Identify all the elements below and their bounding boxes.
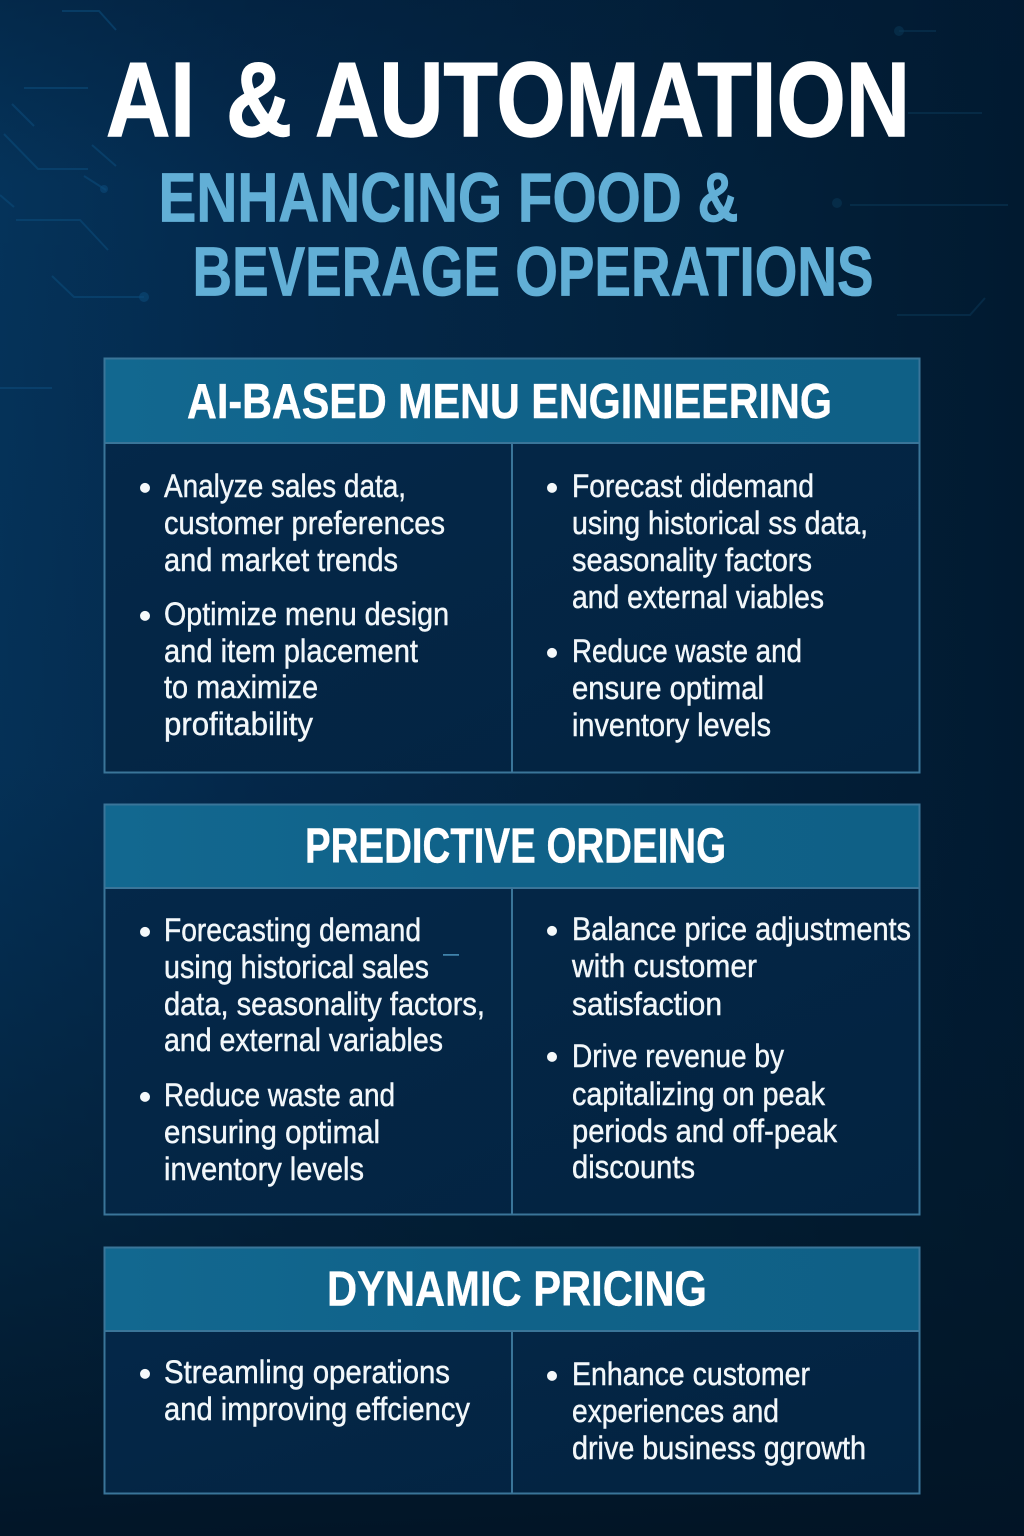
heading: AI-BASED MENU ENGINIEERING bbox=[187, 375, 832, 429]
left column bullets: profitability bbox=[164, 706, 313, 742]
title bbox=[106, 41, 910, 159]
panel: predictive ordering bbox=[104, 804, 920, 1215]
right column bullets bbox=[547, 468, 868, 743]
right column bullets: discounts bbox=[572, 1149, 695, 1185]
left column bullets bbox=[140, 468, 449, 742]
left column bullets: and improving effciency bbox=[164, 1391, 470, 1427]
panel header bbox=[104, 804, 920, 888]
left column bullets: Forecasting demand bbox=[164, 912, 421, 948]
left column bullets: Analyze sales data, bbox=[164, 468, 406, 504]
left column bullets: using historical sales bbox=[164, 949, 429, 985]
right column bullets: and external viables bbox=[572, 579, 824, 615]
right column bullets: with customer bbox=[571, 948, 757, 984]
right column bullets: capitalizing on peak bbox=[572, 1076, 826, 1112]
right column bullets bbox=[547, 1356, 866, 1466]
right column bullets: drive business ggrowth bbox=[572, 1430, 866, 1466]
left column bullets bbox=[140, 1354, 470, 1427]
right column bullets: ensure optimal bbox=[572, 670, 764, 706]
left column bullets: inventory levels bbox=[164, 1151, 364, 1187]
left column bullets: and external variables bbox=[164, 1022, 443, 1058]
subtitle: ENHANCING FOOD & bbox=[158, 158, 738, 236]
right column bullets: Balance price adjustments bbox=[572, 911, 911, 947]
panel header bbox=[104, 1247, 920, 1331]
left column bullets bbox=[140, 912, 485, 1187]
right column bullets: Forecast didemand bbox=[572, 468, 814, 504]
left column bullets: Streamling operations bbox=[164, 1354, 450, 1390]
left column bullets: to maximize bbox=[164, 669, 318, 705]
right column bullets: Drive revenue by bbox=[572, 1038, 784, 1074]
panel header bbox=[104, 358, 920, 443]
left column bullets: and item placement bbox=[164, 633, 418, 669]
right column bullets: seasonality factors bbox=[572, 542, 812, 578]
title: AI bbox=[106, 41, 195, 159]
heading: PREDICTIVE ORDEING bbox=[305, 820, 726, 874]
heading: DYNAMIC PRICING bbox=[327, 1262, 707, 1316]
left column bullets: Optimize menu design bbox=[164, 596, 449, 632]
right column bullets: inventory levels bbox=[572, 707, 771, 743]
title: & bbox=[226, 41, 292, 159]
left column bullets: data, seasonality factors, bbox=[164, 986, 485, 1022]
right column bullets: Reduce waste and bbox=[572, 633, 802, 669]
left column bullets: customer preferences bbox=[164, 505, 445, 541]
right column bullets: satisfaction bbox=[572, 986, 722, 1022]
left column bullets: and market trends bbox=[164, 542, 398, 578]
panel: dynamic pricing bbox=[104, 1247, 920, 1494]
title: AUTOMATION bbox=[315, 41, 910, 159]
left column bullets: ensuring optimal bbox=[164, 1114, 380, 1150]
right column bullets bbox=[547, 911, 911, 1185]
subtitle bbox=[158, 158, 874, 310]
right column bullets: experiences and bbox=[572, 1393, 779, 1429]
right column bullets: Enhance customer bbox=[572, 1356, 810, 1392]
right column bullets: periods and off-peak bbox=[572, 1113, 838, 1149]
panel: AI-based menu engineering bbox=[104, 358, 920, 773]
left column bullets: Reduce waste and bbox=[164, 1077, 395, 1113]
right column bullets: using historical ss data, bbox=[572, 505, 868, 541]
